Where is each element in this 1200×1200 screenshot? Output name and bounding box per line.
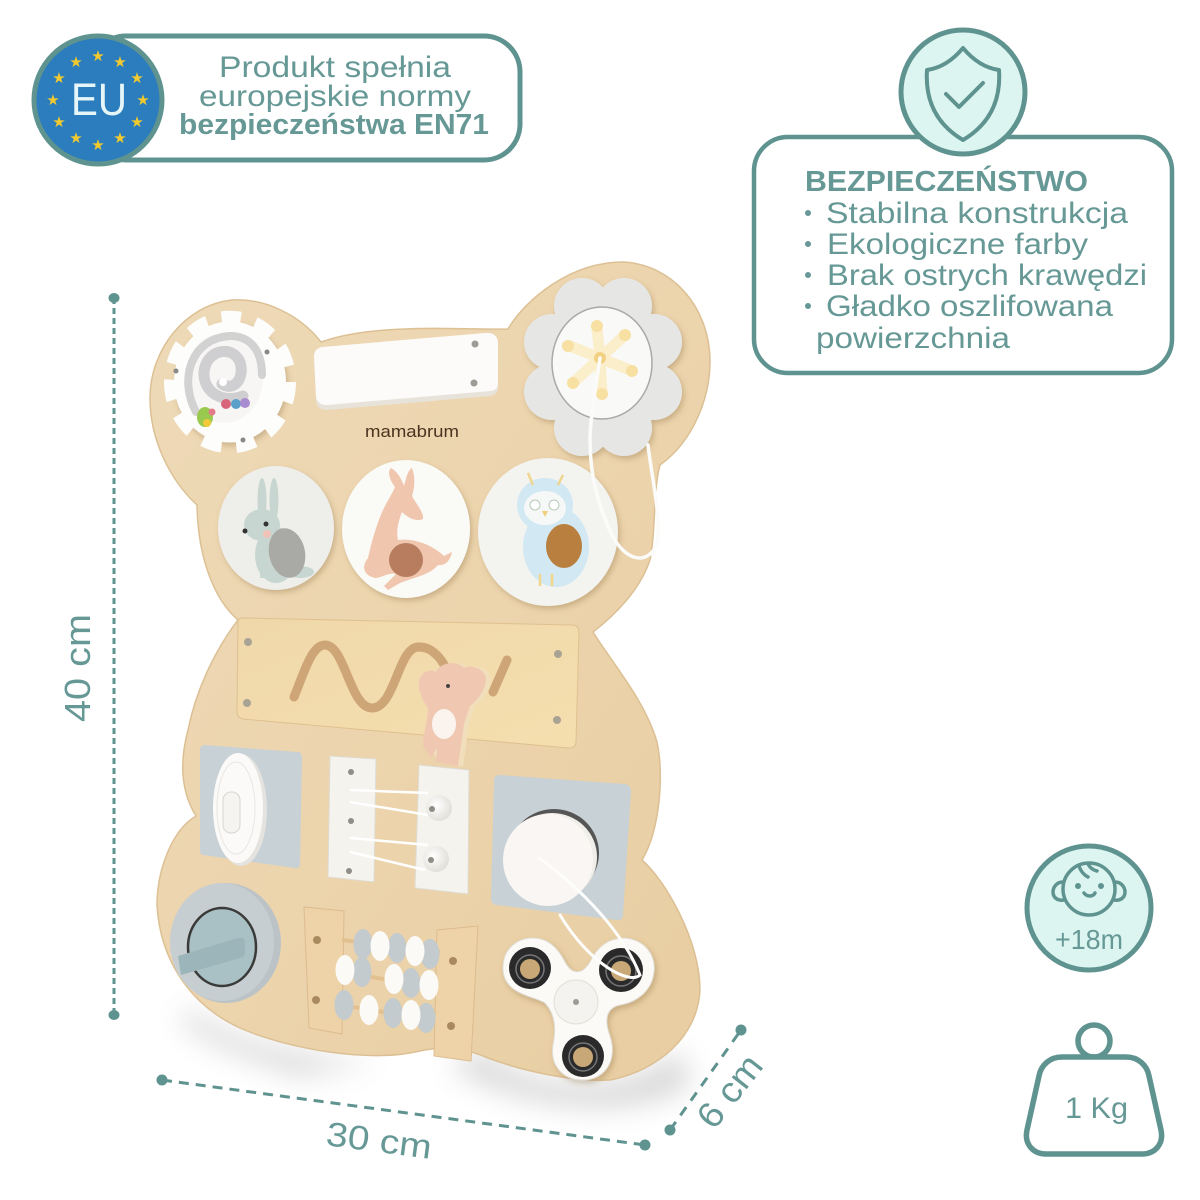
panel heading: BEZPIECZEŃSTWO [805, 164, 1088, 198]
dimension: height 40 cm [57, 293, 120, 1020]
icon: EU flag circle: ★ [69, 54, 83, 71]
badge text: Produkt spełnia [219, 51, 451, 84]
dimension: width 30 cm: 30 cm [324, 1115, 434, 1167]
icon: baby face, age +18 months [1027, 846, 1151, 970]
icon: weight 1 kg [1026, 1025, 1162, 1154]
icon: EU flag circle: ★ [130, 114, 144, 131]
icon: EU flag circle: ★ [52, 70, 66, 87]
safety list: Stabilna konstrukcja [826, 197, 1128, 230]
icon: EU flag circle: ★ [91, 137, 105, 154]
icon: shield with check [901, 30, 1025, 154]
lacing cord [590, 358, 658, 558]
icon: EU flag circle: ★ [69, 130, 83, 147]
mamabrum logo: mamabrum [365, 422, 459, 441]
safety list: Ekologiczne farby [827, 228, 1088, 261]
flower lacing toy [524, 278, 682, 456]
safety list [805, 197, 1147, 355]
wavy track plate [237, 618, 579, 748]
icon: EU flag circle: ★ [91, 48, 105, 65]
icon: baby face, age +18 months: +18m [1055, 924, 1123, 955]
blank white plank [314, 333, 498, 410]
safety list: Gładko oszlifowana [826, 290, 1113, 323]
panel outline [754, 137, 1172, 373]
gear spiral maze toy [171, 318, 289, 446]
deer disc [342, 460, 470, 598]
icon: EU flag circle: ★ [52, 114, 66, 131]
dimension: height 40 cm: 40 cm [57, 614, 98, 722]
dimension: width 30 cm [156, 1074, 650, 1167]
pull cylinder plate [491, 775, 631, 920]
icon: EU flag circle [34, 36, 162, 164]
rabbit disc [218, 466, 334, 590]
icon: weight 1 kg: 1 Kg [1065, 1092, 1128, 1125]
safety panel [754, 30, 1172, 373]
board outline [150, 262, 710, 1080]
icon: EU flag circle: ★ [113, 54, 127, 71]
icon: EU flag circle: ★ [113, 130, 127, 147]
safety list: Brak ostrych krawędzi [827, 259, 1147, 292]
owl disc [478, 458, 618, 606]
badge text: europejskie normy [199, 80, 471, 113]
elastic bead plates [328, 756, 469, 894]
icon: EU flag circle: ★ [130, 70, 144, 87]
pull cord [539, 858, 640, 978]
icon: EU flag circle: ★ [46, 92, 60, 109]
abacus [304, 907, 478, 1061]
EU safety badge [34, 36, 520, 164]
icon: EU flag circle: EU [71, 74, 127, 125]
safety list: powierzchnia [816, 322, 1010, 355]
switch plate [200, 745, 302, 868]
badge text: bezpieczeństwa EN71 [179, 109, 489, 141]
board shadow [180, 1010, 690, 1107]
dimension: depth 6 cm [664, 1024, 771, 1136]
badge outline [90, 36, 520, 160]
badge text [179, 51, 489, 141]
icon: EU flag circle: ★ [136, 92, 150, 109]
wooden bear-shaped activity board [150, 262, 710, 1080]
rotary knob [170, 883, 281, 1003]
bear slider [419, 663, 491, 767]
fidget spinner [503, 938, 654, 1080]
dimension: depth 6 cm: 6 cm [688, 1046, 771, 1136]
